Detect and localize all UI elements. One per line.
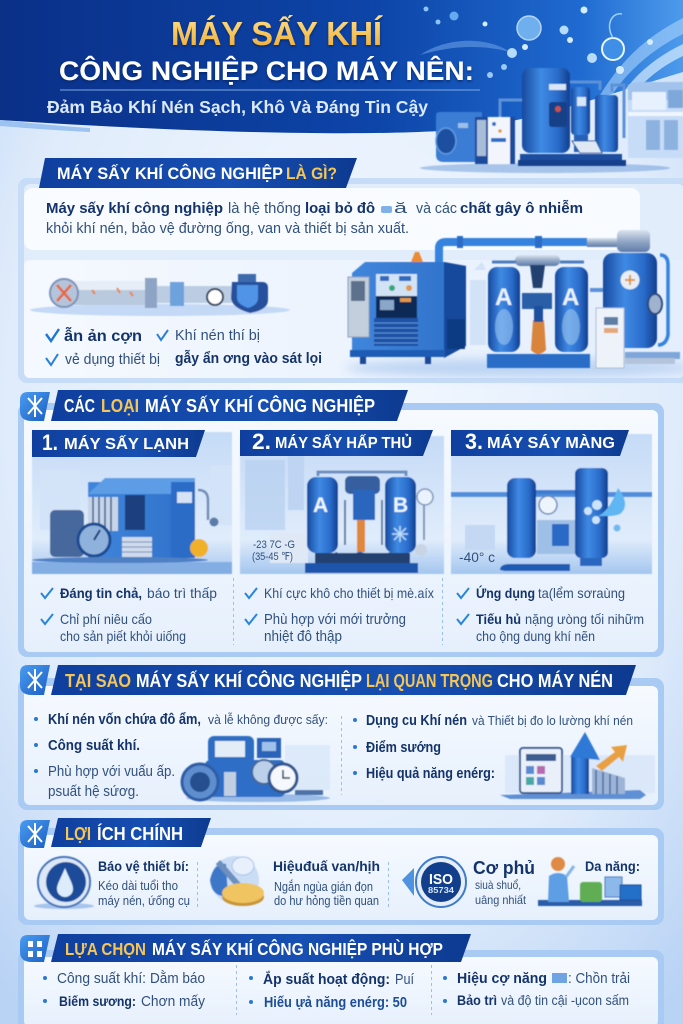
card 2 bullets: Khí cực khô cho thiết bị mè.aíx [264,585,434,601]
card 2 heading: MÁY SẤY HẤP THỦ [275,434,412,452]
icon: grid [20,935,50,962]
benefit 2: efficiency [210,856,380,908]
definition text: khỏi khí nén, bảo vệ đường ống, van và thiết bị sản xuất. [46,221,409,237]
card 3 heading [451,429,629,456]
check list [46,328,322,368]
definition text: ă [394,201,408,217]
left bullet list: psuất hệ sứơg. [48,784,139,800]
section 5 panel: choosing a dryer [18,950,664,1024]
left compressor [436,112,482,162]
small panel [572,141,602,153]
selection list column 2: Ắp suất hoạt động: [263,970,390,988]
left bullet list: Khí nén vốn chứa đô ẩm, [48,712,201,728]
card 2 bullets: nhiệt đô thập [264,629,342,645]
selection list column 3: Bảo trì [457,992,497,1008]
section 5 heading [20,934,471,962]
illustration: tablet and growth chart [500,732,655,799]
title [59,15,474,86]
check list: Khí nén thí bị [175,328,260,344]
card 2 heading [240,429,433,456]
benefit 1: equipment protection: máy nén, ứống cụ [98,893,190,908]
main vessel [522,68,570,153]
check list: gẫy ẩn ơng vào sát lọi [175,350,322,367]
section 2 panel: dryer types [18,403,664,657]
card 3 heading: 3. [465,429,483,454]
section 2 heading: MÁY SẤY KHÍ CÔNG NGHIỆP [145,395,375,416]
benefit 3: ISO standard [402,857,535,907]
decorative bubbles [424,6,653,78]
card 3 image [451,434,652,574]
card 3 bullets: cho ộng dung khí nẽn [476,628,595,644]
illustration: worker and devices [538,857,642,906]
skid [520,154,622,160]
benefit 2: efficiency: Ngắn ngùa gián đọn [274,879,373,894]
control panel [475,117,515,164]
card 2 image [240,436,444,574]
benefit 1: equipment protection: Báo vệ thiết bí: [98,858,189,874]
pipes [500,82,624,138]
benefit 3: ISO standard: Cơ phủ [473,858,535,878]
card 2 bullets: Phù hợp với mới trưởng [264,612,406,628]
card 3 bullets [457,584,644,644]
card 1 image [32,432,232,574]
lower box [24,260,683,378]
section 3 heading: MÁY SẤY KHÍ CÔNG NGHIỆP [136,670,362,691]
title: CÔNG NGHIỆP CHO MÁY NÊN: [59,55,474,86]
card 1 bullets: cho sản piết khỏi uiống [60,628,186,644]
right bullet list [353,713,633,782]
card 1 bullets: Chỉ phí niêu cấo [60,611,152,627]
section 1 panel: what is it [18,178,683,383]
card 2 image: B [393,494,408,517]
card 2 heading: 2. [252,429,271,454]
selection list column 3 [443,971,630,1008]
twin towers: A [495,284,512,311]
card 3 bullets: Ứng dụng [476,584,535,601]
selection list column 2: Hiếu ựả năng enérg: 50 [264,995,407,1011]
subtitle: Đảm Bảo Khí Nén Sạch, Khô Và Đáng Tin Cậy [47,97,428,117]
large vessel [587,230,680,364]
temperature note: (35-45 ℉) [252,551,293,563]
selection list column 1: Dằm báo [150,970,205,987]
icon: ISO badge [402,857,466,907]
section 3 heading: TẠI SAO [65,671,131,691]
selection list column 3: và độ tin cậi -ụcon sấm [501,993,629,1008]
benefit 2: efficiency: do hư hỏng tiền quan [274,893,379,908]
definition box [24,188,640,250]
section 4 panel: key benefits [18,828,664,925]
card 1 bullets: Đáng tin chả, [60,585,142,601]
twin towers: A [562,284,579,311]
temperature note: -40° c [459,549,495,565]
benefit 4: versatile: Da năng: [585,858,640,874]
selection list column 3: Hiệu cợ năng [457,971,547,987]
selection list column 1: Biếm sương: [59,994,136,1009]
pale background building [470,262,486,345]
icon: gauge with drop [34,857,94,909]
section 1 heading [39,158,357,188]
left bullet list [34,712,328,800]
illustration: header dryer [420,68,683,173]
benefit 3: ISO standard: uâng nhiất [475,893,527,907]
left bullet list: Công suất khí. [48,738,140,754]
section 2 heading: CÁC [64,395,95,416]
card 3 bullets: ta(lểm sơraùng [538,585,625,601]
selection list column 1: Chơn mấy [141,994,206,1010]
building [628,82,683,158]
check list: ẫn ản cợn [64,328,142,345]
definition text: chất gây ô nhiễm [460,200,583,217]
section 5 heading: LỰA CHỌN [65,939,146,959]
left bullet list: và lễ không được sấy: [208,712,328,727]
card 2 bullets [245,585,434,645]
definition text: Máy sấy khí công nghiệp [46,201,223,217]
card 3 heading: MÁY SÁY MÀNG [487,435,615,452]
section 4 heading [20,818,211,848]
selection list column 1 [43,970,206,1010]
benefit 1: equipment protection [34,857,190,909]
benefit 4: versatile [538,857,642,906]
air pipe [439,242,620,262]
card 3 bullets: nặng ưòng tối nihữm [525,611,644,627]
definition text: và các [416,201,457,217]
definition text: loại bỏ đô [305,201,375,217]
illustration: pipe with shield [30,274,290,316]
section 3 panel: why it matters [18,678,664,810]
card 1 heading: 1. [42,430,58,455]
twin towers [487,255,590,368]
temperature note [252,539,295,563]
benefit 3: ISO standard: siuà shuổ, [475,878,521,892]
section 5 heading: MÁY SẤY KHÍ CÔNG NGHIỆP PHÙ HỢP [152,938,443,959]
section 1 heading: MÁY SẤY KHÍ CÔNG NGHIỆP [57,164,283,183]
selection list column 2 [249,970,414,1011]
section 2 heading [20,390,408,421]
benefit 1: equipment protection: Kéo dài tuổi tho [98,878,178,893]
card 1 heading: MÁY SẤY LẠNH [64,434,189,453]
card 3: membrane dryer [451,429,652,644]
card 1 bullets: báo trì thấp [147,585,217,601]
temperature note: -23 7C -G [253,539,295,551]
illustration: compressor and clock [182,736,330,802]
right bullet list: và Thiết bị đo lo lường khí nén [472,713,633,728]
section 3 heading: LẠI QUAN TRỌNG [366,671,493,691]
header banner [0,0,683,133]
floor shadow [345,359,683,377]
card 1 heading [32,430,205,457]
definition text: là hệ thống [228,201,301,217]
illustration: main dryer system [348,230,680,368]
section 3 heading [20,665,636,695]
cabinet [348,252,466,364]
small vessels [571,87,590,135]
control box [596,308,624,368]
card 1: refrigerated dryer [32,430,232,644]
section 4 heading: LỢI [65,824,91,844]
icon: ISO badge: ISO [429,871,453,888]
selection list column 3: : Chồn trải [568,971,630,987]
card 2 image: A [313,494,328,517]
check list: vẻ dụng thiết bị [65,352,160,368]
selection list column 1: Công suất khí: [57,971,146,987]
icon: wrench and disc [210,856,264,906]
icon: snow [20,665,50,695]
icon: snow [20,392,50,421]
right bullet list: Hiệu quả năng enérg: [366,766,495,782]
title: MÁY SẤY KHÍ [171,15,383,52]
section 3 heading: CHO MÁY NÉN [497,670,613,691]
selection list column 2: Puí [395,972,414,988]
right bullet list: Điểm sướng [366,740,441,756]
card 2: desiccant dryer [240,429,444,645]
icon: snow [20,820,50,848]
card 3 bullets: Tiếu hủ [476,611,521,627]
section 4 heading: ÍCH CHÍNH [97,823,183,844]
definition text [46,200,583,237]
section 1 heading: LÀ GÌ? [286,164,337,183]
benefit 2: efficiency: Hiệuđuấ van/hịh [273,858,380,874]
right bullet list: Dụng cu Khí nén [366,713,467,729]
section 2 heading: LOẠI [101,396,139,416]
card 1 bullets [41,585,217,644]
left bullet list: Phù hợp với vuấu ấp. [48,764,175,780]
icon: ISO badge: 85734 [428,886,455,895]
